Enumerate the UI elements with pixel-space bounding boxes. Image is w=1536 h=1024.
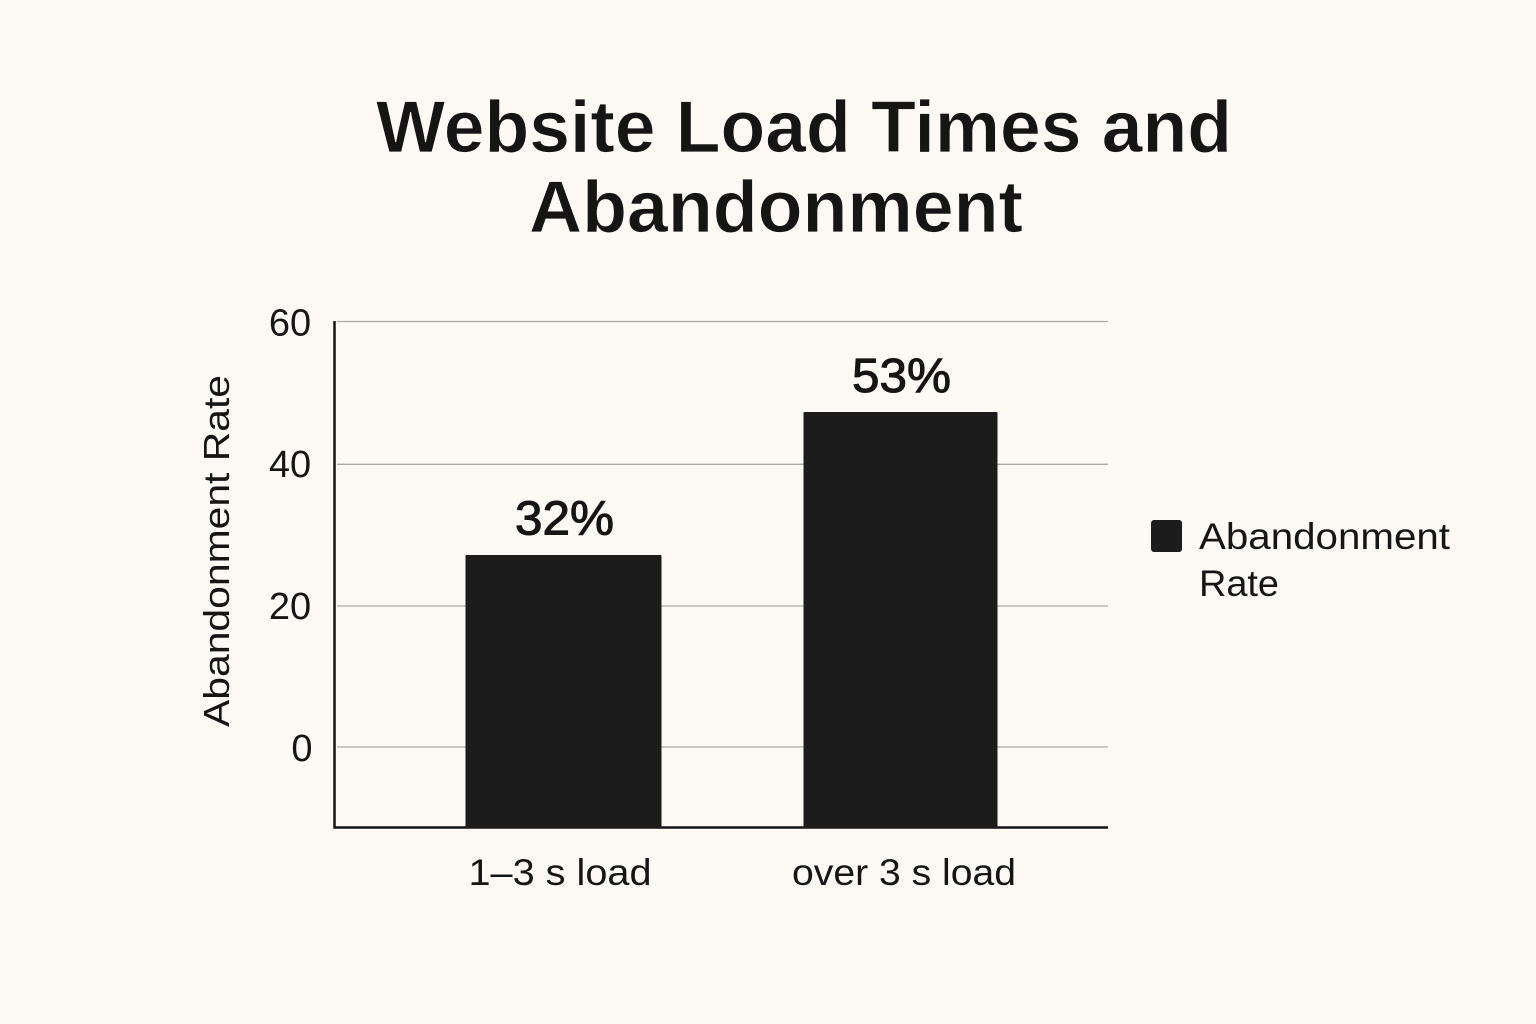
legend label: Rate bbox=[1199, 563, 1279, 604]
x label: 1–3 s load: 1–3 s load bbox=[468, 852, 652, 893]
y axis tick labels: 20 bbox=[269, 586, 311, 628]
bar: 1–3 s load bbox=[466, 555, 662, 828]
y axis tick labels: 0 bbox=[291, 728, 313, 770]
y axis tick labels: 40 bbox=[269, 444, 311, 486]
x label: over 3 s load: over 3 s load bbox=[792, 852, 1016, 893]
title: Abandonment bbox=[529, 167, 1023, 248]
value label: 53%: 53% bbox=[852, 350, 951, 403]
title bbox=[376, 87, 1232, 248]
title: Website Load Times and bbox=[376, 87, 1232, 168]
legend label bbox=[1199, 516, 1451, 604]
value label: 32%: 32% bbox=[515, 492, 614, 546]
axes bbox=[334, 321, 1108, 828]
y axis tick labels bbox=[269, 302, 313, 770]
y axis title: Abandonment Rate bbox=[196, 375, 237, 727]
bar chart bbox=[196, 302, 1108, 893]
bar: over 3 s load bbox=[804, 412, 998, 828]
y axis tick labels: 60 bbox=[269, 302, 311, 344]
legend swatch bbox=[1151, 520, 1182, 552]
legend bbox=[1151, 516, 1451, 604]
legend label: Abandonment bbox=[1199, 516, 1451, 557]
